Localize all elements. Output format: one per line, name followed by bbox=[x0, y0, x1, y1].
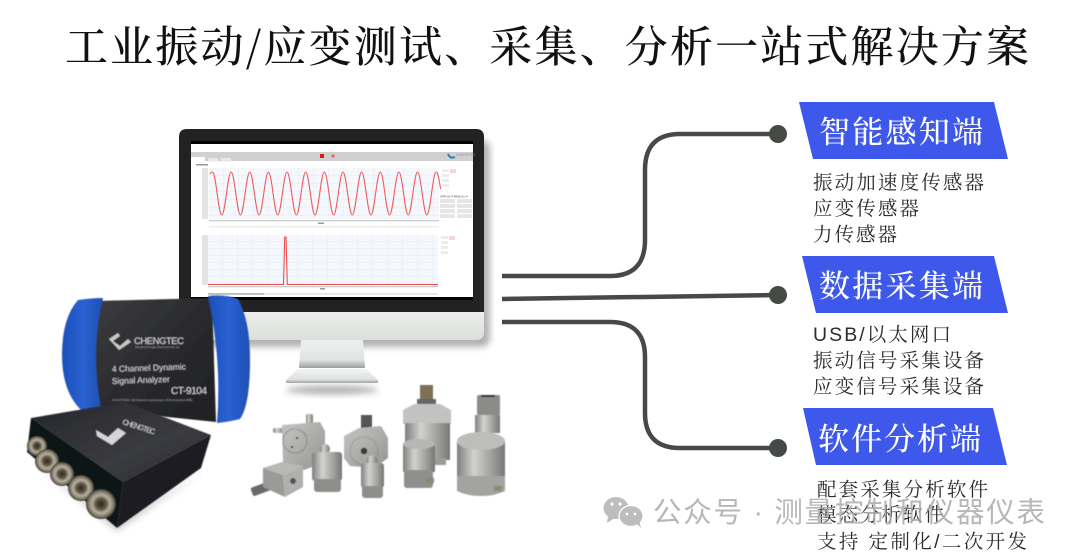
legend bbox=[441, 236, 455, 254]
sensor: large cylinder bbox=[457, 432, 505, 496]
list: 应变传感器 bbox=[813, 197, 919, 220]
sensor: small cube bbox=[250, 462, 303, 497]
list: USB/以太网口 bbox=[813, 324, 951, 346]
device labels: Signal Analyzer bbox=[112, 374, 170, 386]
device logo: CHENGTEC bbox=[134, 336, 184, 347]
time-domain chart bbox=[202, 168, 472, 228]
title: 工业振动/应变测试、采集、分析一站式解决方案 bbox=[65, 14, 1029, 75]
right rubber bumper bbox=[208, 295, 250, 423]
connector lines bbox=[502, 125, 787, 457]
list: 支持 定制化/二次开发 bbox=[817, 531, 1027, 553]
monitor bezel bbox=[179, 129, 484, 312]
monitor shadow bbox=[186, 140, 490, 347]
legend bbox=[442, 169, 456, 187]
frequency chart bbox=[202, 235, 455, 295]
watermark bbox=[604, 497, 1045, 529]
BNC connectors bbox=[27, 436, 116, 519]
sensor: small cylinder bbox=[361, 456, 384, 498]
sensor: cylinder bbox=[312, 444, 342, 492]
right face bbox=[117, 435, 211, 528]
list: 力传感器 bbox=[813, 223, 897, 246]
line to software bbox=[502, 322, 787, 457]
monitor chin bbox=[179, 312, 484, 340]
list bbox=[817, 479, 1027, 553]
device labels: 4-Ch/CT-9104, 100 kSa/s/ch synchronous, 24-bit resolution IEPE bbox=[112, 398, 193, 402]
sensor: tall hex bbox=[403, 385, 451, 465]
device body bbox=[92, 298, 216, 422]
software screen bbox=[191, 144, 476, 297]
sensor: square block bbox=[273, 414, 325, 470]
device logo: CHENGTEC bbox=[121, 417, 157, 437]
toolbar: CHENGTEC bbox=[456, 153, 476, 157]
left rubber bumper bbox=[62, 298, 103, 411]
device labels: CT-9104 bbox=[171, 386, 207, 397]
device shadow bbox=[35, 465, 203, 531]
black acquisition device bbox=[27, 402, 211, 531]
list bbox=[813, 171, 984, 246]
watermark text: 公众号 · 测量控制和仪器仪表 bbox=[653, 497, 1045, 529]
list: 振动信号采集设备 bbox=[813, 350, 984, 372]
device labels bbox=[112, 361, 207, 402]
heading bbox=[803, 408, 1007, 465]
sensor: medium cylinder bbox=[403, 439, 435, 488]
blue signal analyzer device bbox=[62, 295, 250, 423]
panel: software analysis bbox=[803, 408, 1027, 553]
vibration sensors bbox=[250, 385, 505, 498]
value table bbox=[440, 194, 472, 218]
panel: data acquisition bbox=[802, 256, 1008, 398]
list: 配套采集分析软件 bbox=[817, 479, 988, 501]
value table: VPP-01-4 RMS-01-4 bbox=[440, 194, 468, 198]
device logo bbox=[109, 333, 184, 350]
sensor: threaded connector bbox=[475, 395, 500, 433]
heading: 智能感知端 bbox=[819, 107, 983, 152]
line to sensors bbox=[502, 125, 787, 276]
list: 模态分析软件 bbox=[817, 504, 944, 526]
monitor bbox=[179, 129, 490, 394]
heading bbox=[799, 102, 1008, 159]
device logo bbox=[96, 417, 157, 445]
front face bbox=[27, 418, 123, 528]
panel: smart sensing bbox=[799, 102, 1008, 246]
toolbar bbox=[191, 152, 476, 166]
line to acquisition bbox=[502, 286, 787, 304]
top face bbox=[31, 402, 211, 482]
icon: wechat bbox=[604, 497, 643, 528]
device labels: 4 Channel Dynamic bbox=[112, 361, 187, 374]
device logo: Shanghai Chengtec Electronics CO.,Ltd bbox=[135, 346, 180, 349]
list bbox=[813, 324, 984, 398]
heading: 软件分析端 bbox=[818, 414, 981, 459]
list: 振动加速度传感器 bbox=[813, 171, 984, 194]
heading bbox=[802, 256, 1008, 313]
list: 应变信号采集设备 bbox=[813, 376, 984, 398]
heading: 数据采集端 bbox=[819, 261, 983, 306]
sensor: large block bbox=[344, 415, 388, 468]
monitor stand bbox=[286, 340, 378, 394]
